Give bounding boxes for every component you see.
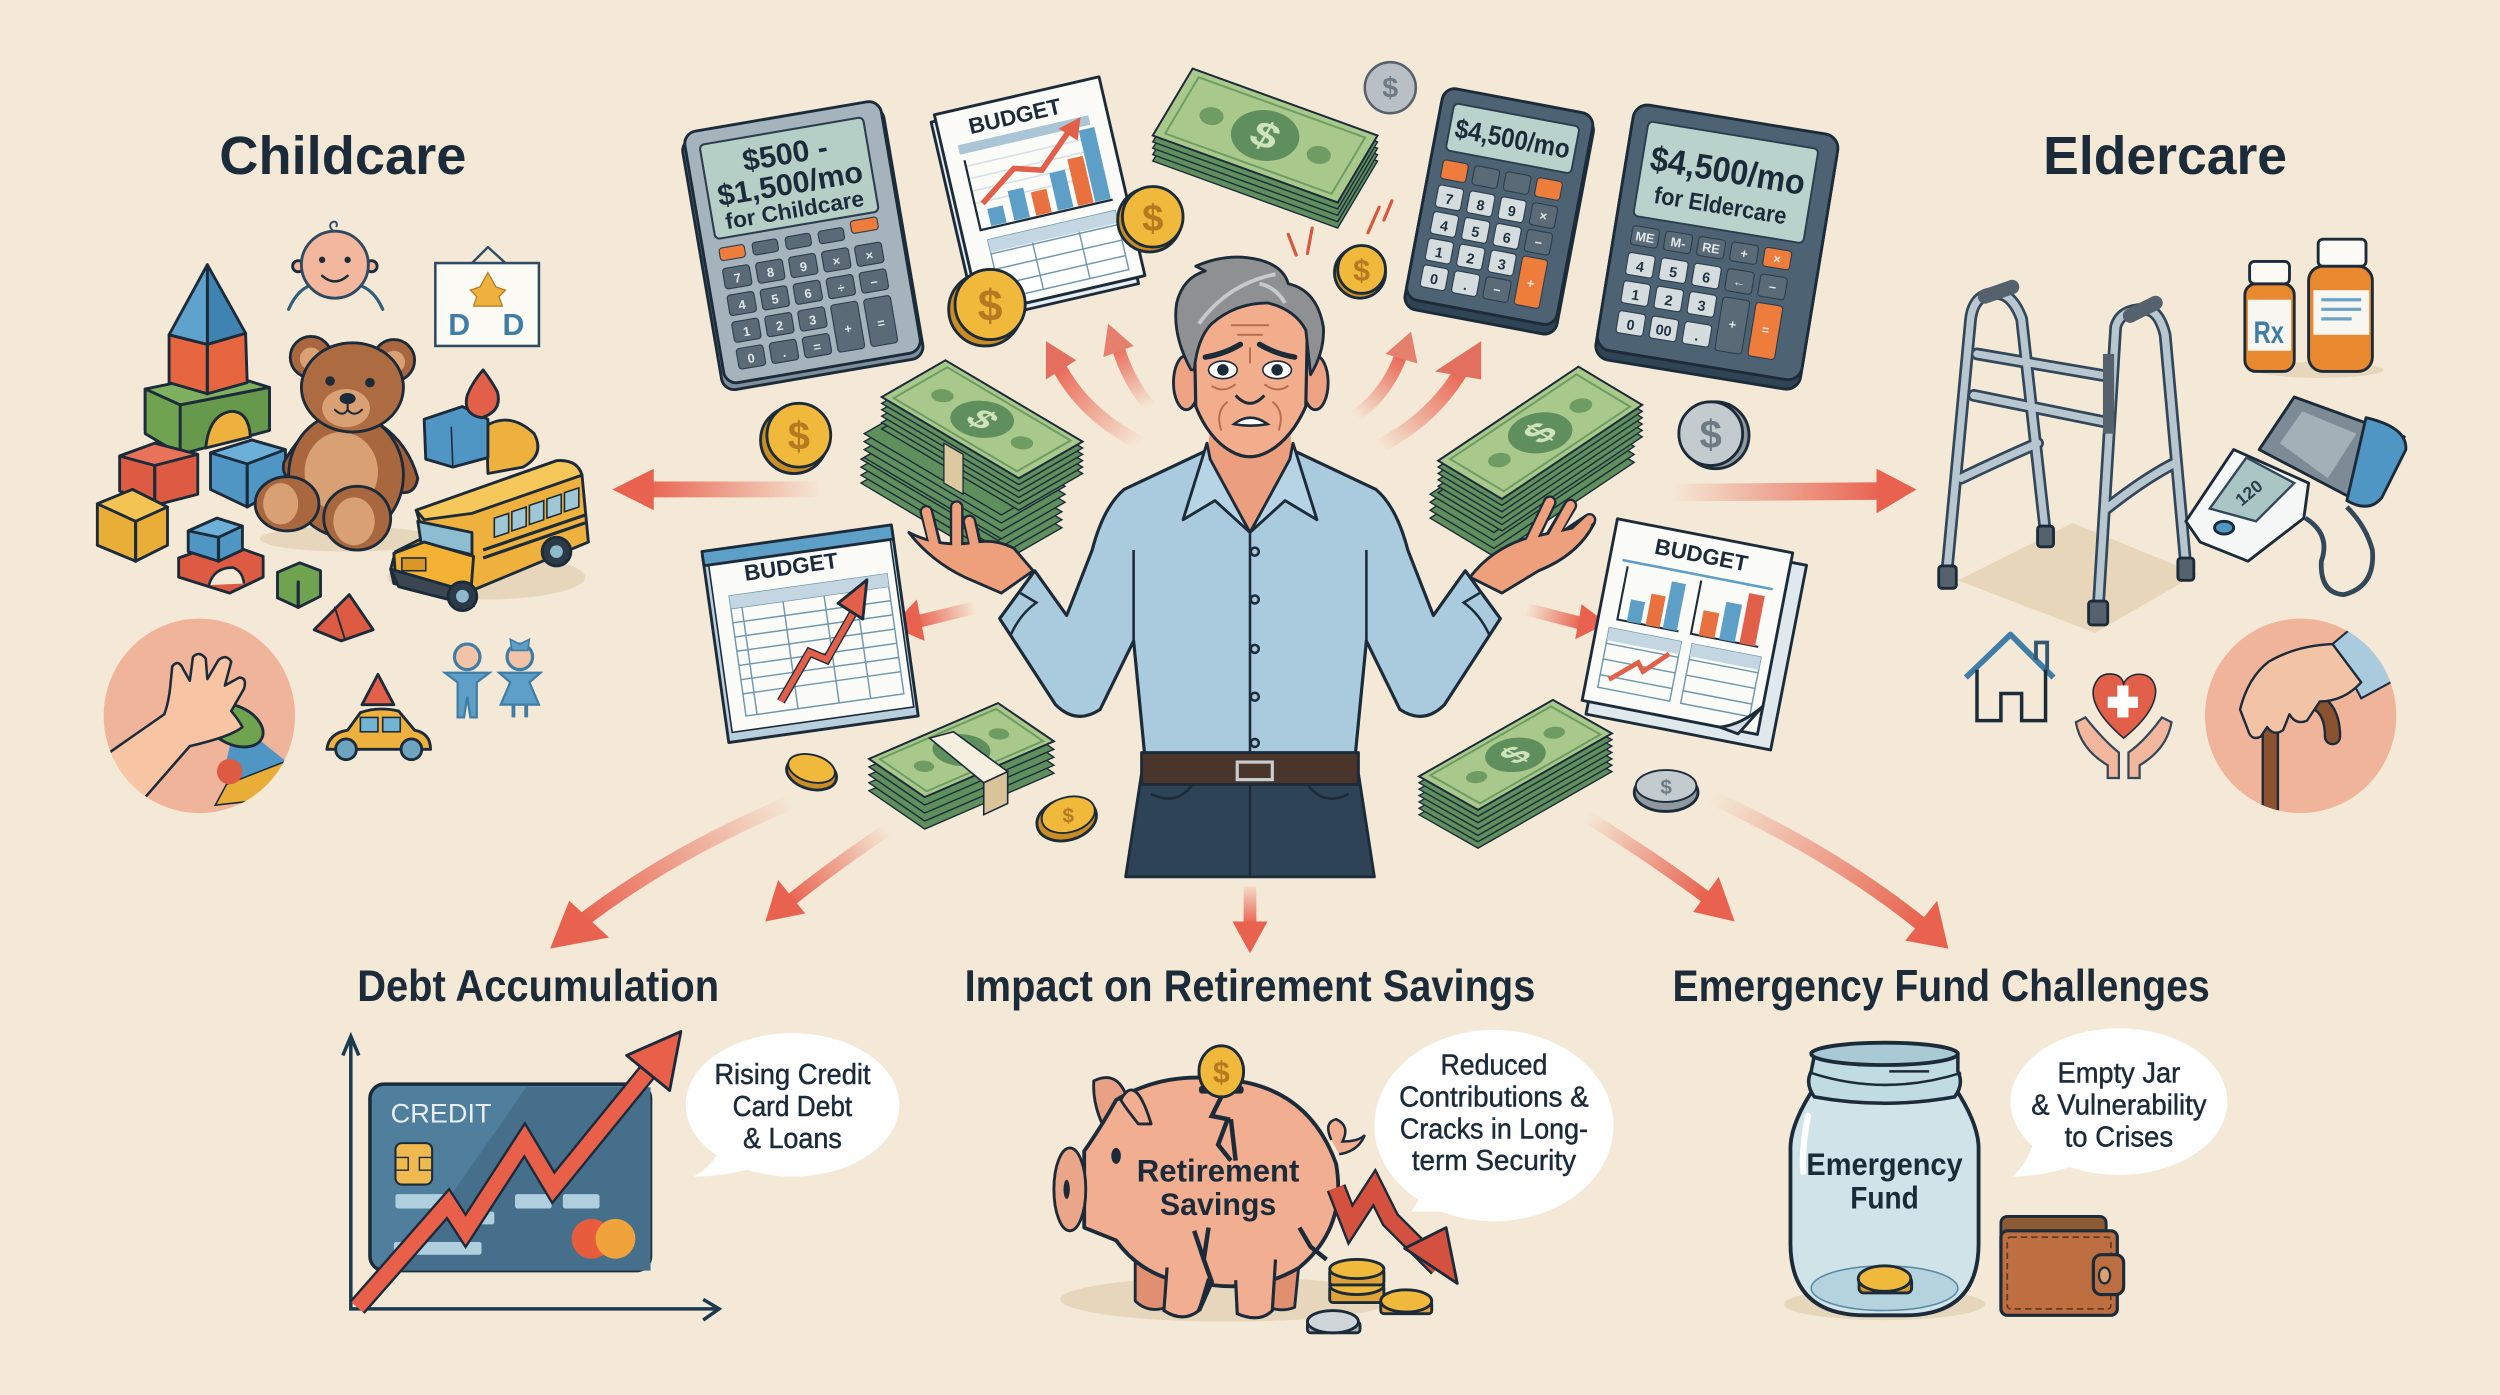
- coin: silver flat: [1634, 770, 1698, 811]
- calculator: eldercare small: ×: [1538, 208, 1548, 224]
- calculator: eldercare large: RE: [1701, 239, 1721, 257]
- calculator: childcare cost: −: [869, 274, 879, 290]
- calculator: eldercare small: 9: [1506, 203, 1517, 221]
- icon: walker: [1939, 287, 2197, 633]
- icon: blood pressure monitor: 120: [2231, 476, 2267, 510]
- calculator: childcare cost: $500 -: [740, 131, 830, 178]
- person: worried man: [1000, 257, 1500, 877]
- calculator: eldercare small: 0: [1429, 271, 1439, 289]
- calculator: childcare cost: =: [812, 339, 822, 355]
- budget sheet: left with rising arrow: BUDGET: [743, 548, 840, 586]
- callout: rising debt: Rising Credit: [714, 1059, 871, 1091]
- calculator: eldercare small: 6: [1501, 230, 1512, 247]
- neck: [1207, 427, 1293, 532]
- calculator: childcare cost: $1,500/mo: [715, 156, 865, 213]
- heading: Debt Accumulation: Debt Accumulation: [357, 962, 719, 1011]
- arrow: to retirement savings: [1232, 886, 1268, 953]
- calculator: childcare cost: 6: [803, 285, 813, 301]
- coin: silver top: $: [1382, 72, 1398, 104]
- pants: [1126, 773, 1374, 877]
- shirt details: [1011, 532, 1489, 756]
- coin: above right of head: $: [1353, 255, 1370, 288]
- calculator: childcare cost: +: [843, 321, 853, 337]
- jar label: Emergency: [1806, 1146, 1963, 1182]
- calculator: eldercare large: 3: [1696, 298, 1707, 315]
- arrow: to emergency fund inner: [1586, 816, 1735, 921]
- arrow: to debt accumulation outer: [550, 802, 792, 949]
- icon: child hand playing with toy: [96, 619, 295, 813]
- cash stack: top centre: $: [1242, 113, 1289, 158]
- calculator: childcare cost: ×: [832, 253, 841, 269]
- calculator: eldercare small: 4: [1439, 218, 1449, 235]
- calculator: childcare cost: =: [876, 315, 886, 331]
- calculator: eldercare large: .: [1693, 328, 1700, 345]
- callout: empty jar: Empty Jar: [2058, 1058, 2181, 1090]
- calculator: eldercare small: −: [1492, 282, 1502, 298]
- icon: teddy bear: [255, 336, 435, 552]
- icon: alphabet sign: D: [448, 309, 470, 342]
- coin: silver flat: $: [1660, 776, 1672, 799]
- nose: [1236, 395, 1264, 403]
- icon: house: [1966, 635, 2054, 721]
- piggy bank: $: [1213, 1057, 1230, 1090]
- emergency fund jar: [1784, 1043, 1985, 1320]
- heading: Childcare: Childcare: [219, 126, 466, 186]
- callout: reduced contributions: [1374, 1030, 1613, 1221]
- eyes: [1209, 361, 1291, 379]
- calculator: childcare cost: 0: [746, 350, 756, 366]
- callout: reduced contributions: term Security: [1412, 1145, 1577, 1177]
- calculator: eldercare large: 1: [1630, 287, 1641, 304]
- calculator: childcare cost: [680, 99, 925, 392]
- calculator: eldercare small: +: [1526, 275, 1536, 291]
- hand: right holding cash: [1470, 502, 1594, 593]
- credit card: CREDIT: [391, 1097, 492, 1128]
- calculator: eldercare large: −: [1768, 279, 1777, 295]
- hair: [1176, 257, 1323, 375]
- calculator: eldercare small: [1403, 87, 1596, 336]
- arrow: to eldercare: [1671, 469, 1916, 513]
- callout: rising debt: [686, 1033, 899, 1177]
- icon: heart in caring hands: [2076, 674, 2171, 778]
- calculator: eldercare large: 0: [1625, 317, 1636, 334]
- budget sheet: top with bar chart: [930, 77, 1146, 321]
- coin: right of budget: [1118, 187, 1183, 252]
- calculator: childcare cost: 3: [808, 312, 817, 328]
- calculator: childcare cost: 5: [770, 291, 780, 307]
- icon: school bus: [387, 461, 588, 611]
- coin: below budget: [949, 269, 1025, 346]
- calculator: eldercare small: 8: [1475, 198, 1486, 215]
- coin: left of cash: $: [788, 415, 810, 459]
- cash stack: held in left hand: [861, 360, 1083, 564]
- piggy label line 2: Savings: [1160, 1186, 1276, 1222]
- calculator: childcare cost: ×: [865, 247, 874, 263]
- callout: reduced contributions: Contributions &: [1399, 1081, 1589, 1113]
- calculator: eldercare large: ←: [1732, 273, 1747, 290]
- callout: rising debt: & Loans: [743, 1123, 842, 1155]
- callout: empty jar: [2010, 1028, 2227, 1177]
- jar label line 2: Fund: [1850, 1179, 1919, 1215]
- budget sheet: top with bar chart: BUDGET: [966, 93, 1064, 139]
- wallet: [2001, 1216, 2124, 1315]
- icon: two children: [445, 639, 541, 717]
- coin: silver top: [1365, 62, 1416, 113]
- panel: childcare: [96, 126, 588, 813]
- calculator: eldercare large: 6: [1701, 270, 1711, 287]
- callout: empty jar: to Crises: [2065, 1121, 2173, 1153]
- wrinkles: [1212, 325, 1288, 430]
- icon: prescription bottles: [2245, 239, 2384, 378]
- calculator: childcare cost: .: [781, 345, 787, 360]
- coin: below budget: $: [978, 281, 1003, 330]
- budget sheet: right with bar charts: [1580, 519, 1808, 750]
- calculator: childcare cost: 4: [737, 296, 748, 313]
- icon: elderly hand on cane: [2205, 619, 2399, 816]
- icon: prescription bottles: Rx: [2254, 314, 2284, 350]
- callout: reduced contributions: Reduced: [1441, 1050, 1547, 1082]
- gold and silver coin pile: [1307, 1259, 1432, 1333]
- icon: alphabet sign: D: [503, 309, 524, 342]
- icon: toy car with triangle: [327, 674, 431, 760]
- calculator: eldercare small: 7: [1444, 192, 1454, 209]
- calculator: eldercare large: ×: [1772, 251, 1782, 267]
- calculator: eldercare small: 3: [1496, 257, 1507, 274]
- belt: [1142, 753, 1358, 784]
- icon: baby face: [289, 222, 383, 309]
- arrow: to budget right: [1526, 604, 1607, 639]
- calculator: childcare cost: 8: [766, 264, 775, 280]
- coin: silver right: [1679, 402, 1749, 469]
- panel: eldercare: [1939, 126, 2406, 816]
- arrows: red flow arrows from person to topics: [550, 324, 1948, 953]
- calculator: eldercare small: $4,500/mo: [1453, 112, 1573, 165]
- calculator: eldercare large: $4,500/mo: [1647, 139, 1808, 203]
- panel: impact on retirement savings: [965, 962, 1613, 1333]
- calculator: eldercare large: ME: [1634, 228, 1656, 246]
- coin: above right of head: [1334, 246, 1386, 298]
- coin: left of cash: [761, 403, 831, 474]
- ears: [1173, 356, 1328, 410]
- calculator: eldercare large: for Eldercare: [1652, 182, 1789, 230]
- mouth: [1234, 418, 1268, 426]
- cash stack: held in right hand: $: [1514, 416, 1567, 450]
- arrow: to eldercare calculator small: [1355, 332, 1417, 416]
- calculator: eldercare large: 5: [1668, 264, 1678, 282]
- calculator: childcare cost: 7: [733, 270, 742, 286]
- calculator: eldercare large: +: [1728, 316, 1737, 332]
- calculator: eldercare small: 2: [1465, 251, 1476, 268]
- calculator: eldercare large: 4: [1635, 259, 1645, 276]
- icon: blood pressure monitor: [2186, 397, 2406, 595]
- face: [1194, 300, 1307, 457]
- coin: lying flat lower: $: [1062, 805, 1074, 828]
- arrow: to budget sheet: [1103, 324, 1150, 407]
- credit card: [370, 1084, 651, 1271]
- calculator: eldercare large: [1594, 103, 1840, 391]
- cash stack: lower right: $: [1491, 741, 1540, 769]
- calculator: eldercare large: =: [1761, 322, 1770, 338]
- calculator: childcare cost: 2: [775, 318, 784, 334]
- callout: reduced contributions: Cracks in Long-: [1400, 1113, 1588, 1145]
- coin: lying flat left: [783, 749, 840, 795]
- eyebrows: [1205, 344, 1295, 357]
- budget sheet: right with bar charts: BUDGET: [1653, 534, 1750, 576]
- calculator: eldercare large: 2: [1663, 293, 1674, 310]
- icon: loose toy blocks: [179, 518, 373, 641]
- collar: [1183, 443, 1317, 532]
- callout: rising debt: Card Debt: [733, 1091, 852, 1123]
- budget sheet: left with rising arrow: [702, 525, 918, 743]
- calculator: eldercare large: M-: [1669, 234, 1687, 251]
- shirt: [1000, 450, 1500, 756]
- icon: alphabet sign: [435, 247, 539, 346]
- single coin: [1858, 1266, 1912, 1293]
- calculator: childcare cost: for Childcare: [723, 186, 866, 234]
- piggy bank: [1054, 1046, 1395, 1322]
- calculator: eldercare large: +: [1739, 245, 1749, 261]
- calculator: eldercare small: 1: [1434, 245, 1444, 262]
- cash stack: lower left with band: [869, 703, 1054, 829]
- coin: silver right: $: [1700, 413, 1722, 457]
- calculator: childcare cost: 9: [799, 259, 808, 275]
- icon: blue cube, red drop and yellow cylinder: [424, 370, 538, 474]
- piggy label: Retirement: [1137, 1152, 1300, 1188]
- arrow: to budget left: [891, 599, 976, 641]
- hair highlight: [1199, 274, 1285, 324]
- coin: right of budget: $: [1142, 197, 1163, 240]
- stress marks: [1288, 201, 1392, 255]
- calculator: eldercare large: 00: [1654, 322, 1673, 340]
- arrow: to childcare: [612, 469, 821, 510]
- rising debt arrow: [357, 1032, 681, 1307]
- icon: toy block tower: [97, 265, 285, 561]
- cash stack: top centre: [1153, 69, 1378, 228]
- cash stack: held in left hand: $: [956, 404, 1009, 434]
- calculator: childcare cost: ÷: [836, 280, 846, 296]
- arrow: to debt accumulation inner: [765, 829, 888, 921]
- callout: empty jar: & Vulnerability: [2031, 1089, 2207, 1121]
- calculator: eldercare small: 5: [1470, 224, 1481, 241]
- falling arrow: [1336, 1188, 1457, 1283]
- heading: Emergency Fund Challenges: Emergency Fund Challenges: [1672, 962, 2210, 1011]
- coin: lying flat lower: [1032, 791, 1101, 847]
- panel: debt accumulation: [343, 962, 899, 1320]
- hand: left holding cash: [909, 507, 1033, 593]
- cash stack: lower right: [1419, 700, 1612, 848]
- calculator: eldercare small: −: [1533, 234, 1543, 251]
- arrow: to eldercare calculator large: [1379, 341, 1481, 446]
- arrow: to emergency fund outer: [1711, 797, 1948, 949]
- calculator: eldercare small: .: [1462, 278, 1469, 294]
- cash stack: held in right hand: [1430, 367, 1642, 556]
- heading: Impact on Retirement Savings: Impact on Retirement Savings: [965, 962, 1535, 1011]
- chart axes: [343, 1036, 719, 1320]
- calculator: childcare cost: 1: [742, 323, 751, 339]
- coins: gold and silver: [761, 62, 1749, 847]
- arrow: to childcare calculator: [1046, 341, 1140, 443]
- heading: Eldercare: Eldercare: [2043, 126, 2287, 186]
- panel: emergency fund challenges: [1672, 962, 2227, 1320]
